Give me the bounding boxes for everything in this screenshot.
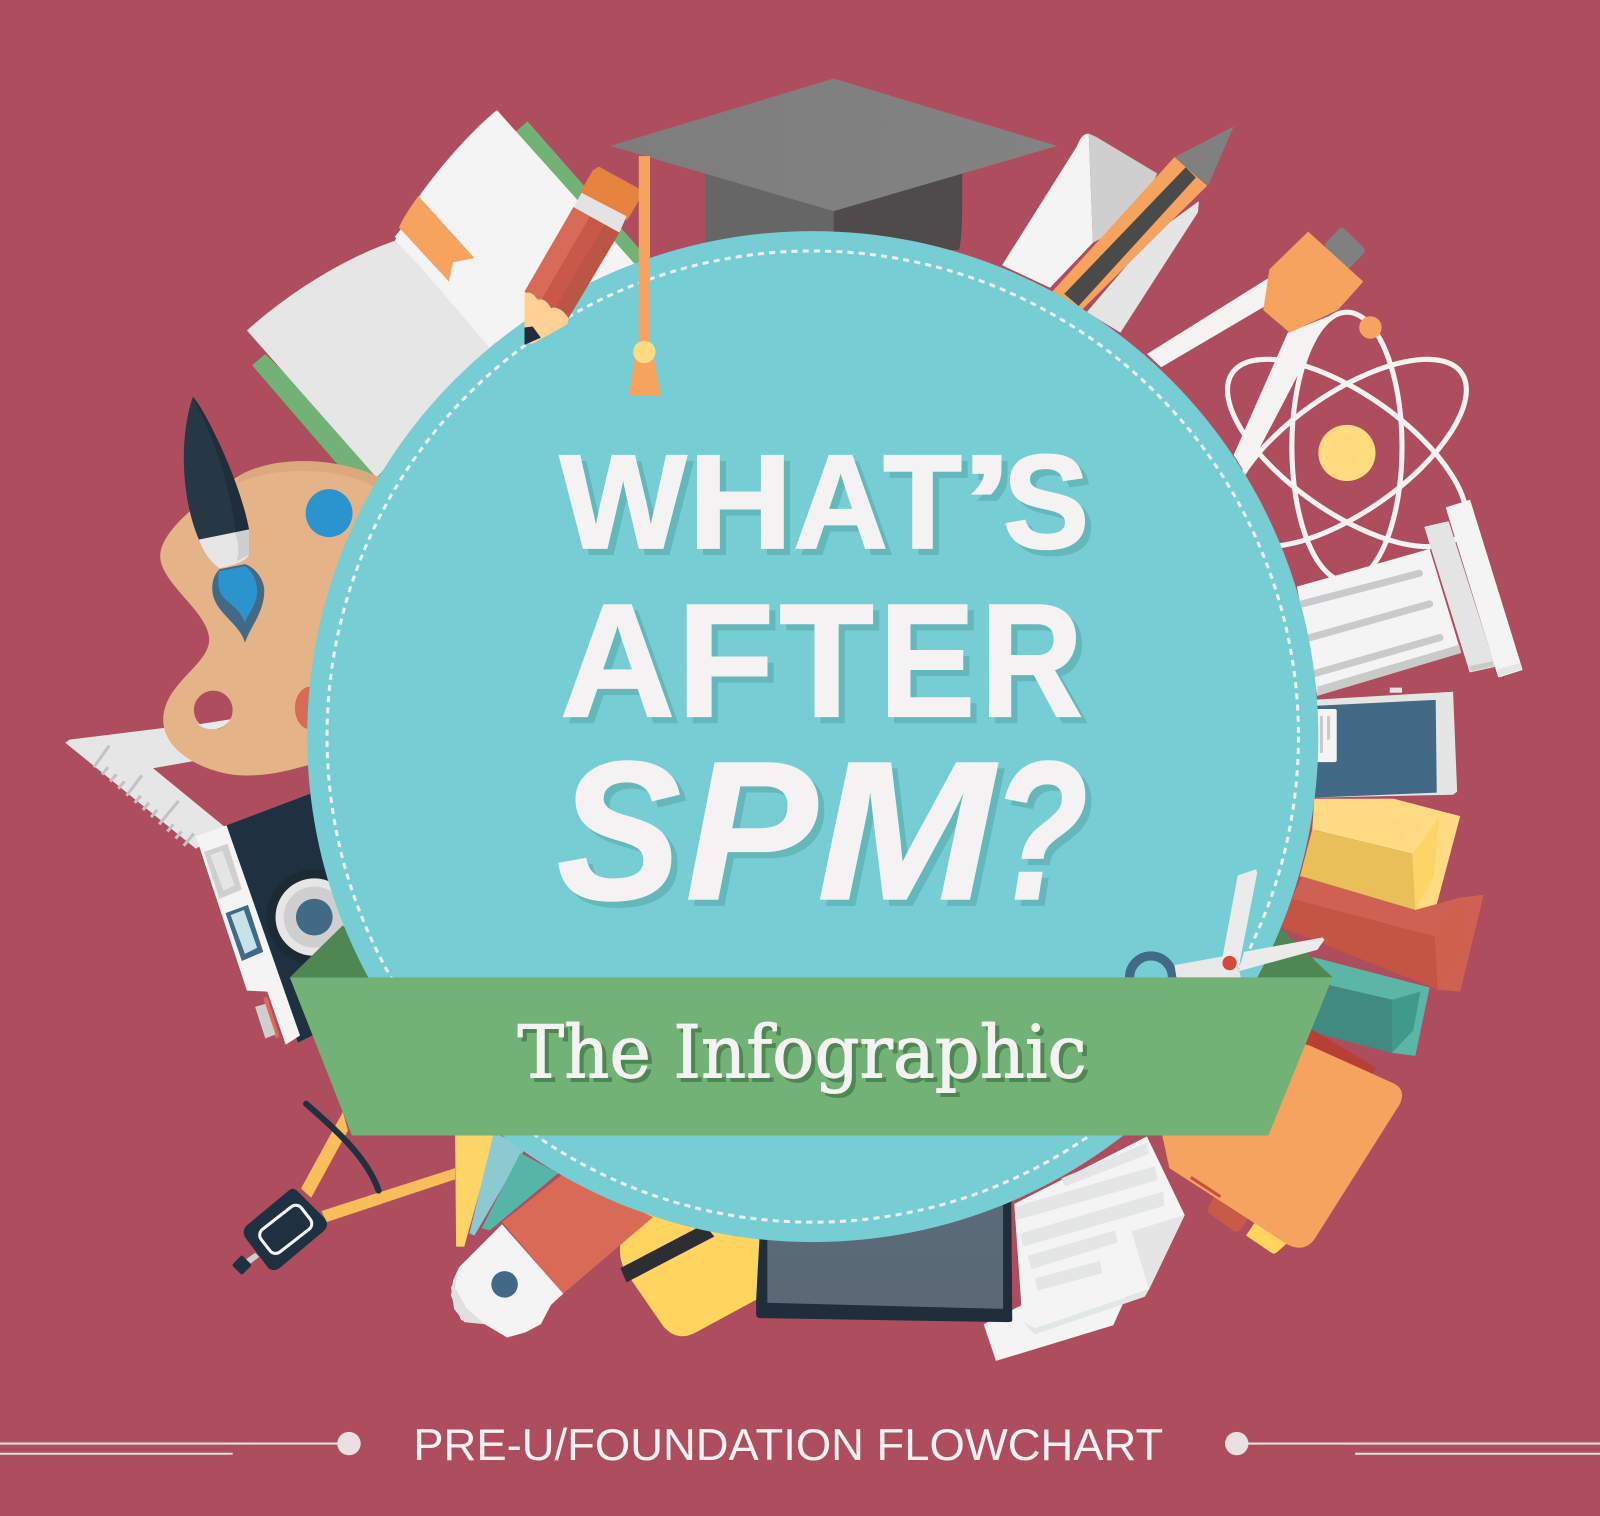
- palette: thumb hole: [194, 691, 233, 729]
- title: AFTER: A: [566, 577, 681, 757]
- icon: graduation cap board: [610, 79, 1057, 211]
- folder: red tab: [1208, 1196, 1249, 1232]
- icon: teal book: [1305, 957, 1430, 1056]
- icon: open book: [247, 110, 645, 513]
- title: AFTER: F: [683, 577, 780, 757]
- title: SPM?: ?: [998, 727, 1094, 947]
- icon: drawing compass: [1147, 226, 1367, 474]
- title: AFTER: F: [677, 571, 774, 751]
- green ribbon banner: [290, 977, 1333, 1135]
- title: AFTER: E: [885, 577, 981, 757]
- icon: red pencil: [524, 168, 640, 345]
- icon: greek column: [1297, 501, 1521, 696]
- icon: paint tube: [451, 1175, 653, 1337]
- paint tube: cap opening: [491, 1271, 518, 1298]
- icon: dark tablet: [756, 1194, 1012, 1322]
- title: WHAT'S: T: [889, 434, 968, 583]
- footer: right rule: [1225, 1432, 1600, 1455]
- title: WHAT'S: W: [566, 434, 693, 583]
- title: SPM?: S: [557, 721, 681, 941]
- title: WHAT'S: ’: [967, 434, 1019, 583]
- folder: yellow tab: [1246, 1219, 1288, 1254]
- footer: left rule: [0, 1432, 361, 1455]
- icon: red book: [1282, 876, 1484, 992]
- title: SPM?: M: [823, 727, 1004, 947]
- ribbon fold right: [1224, 929, 1333, 977]
- icon: orange folder: [1162, 1020, 1402, 1254]
- title: WHAT'S: [560, 428, 1095, 583]
- subtitle: The Infographic: The Infographic: [521, 1014, 1091, 1099]
- title: WHAT'S: S: [1009, 434, 1095, 583]
- icon: grey tipped pencil: [1052, 127, 1234, 312]
- title: SPM?: M: [817, 721, 998, 941]
- title: SPM?: [557, 721, 1094, 947]
- icon: yellow book: [1300, 799, 1460, 912]
- icon: triangle ruler: [65, 727, 227, 849]
- title: AFTER: E: [879, 571, 975, 751]
- title: SPM?: ?: [992, 721, 1088, 941]
- icon: paint brush: [184, 397, 264, 643]
- title: WHAT'S: W: [560, 428, 687, 577]
- footer heading: PRE-U/FOUNDATION FLOWCHART: [413, 1419, 1163, 1470]
- title: WHAT'S: A: [800, 434, 894, 583]
- title: AFTER: [560, 571, 1089, 757]
- title: SPM?: P: [692, 727, 824, 947]
- title: AFTER: R: [980, 571, 1083, 751]
- title: WHAT'S: A: [793, 428, 888, 577]
- graduation cap tassel: [629, 156, 661, 396]
- icon: bow compass: [232, 1104, 455, 1275]
- icon: camera: [196, 788, 388, 1045]
- camera: display: [226, 905, 263, 961]
- icon: colour swatch fan: [455, 1132, 558, 1247]
- atom: electron: [1359, 316, 1382, 339]
- title: SPM?: P: [686, 721, 818, 941]
- title: AFTER: T: [779, 571, 874, 751]
- title: AFTER: A: [560, 571, 675, 751]
- icon: atom: [1198, 312, 1495, 582]
- icon: tablet device: [1311, 688, 1457, 798]
- palette: blue paint: [306, 489, 353, 537]
- title: WHAT'S: S: [1003, 428, 1089, 577]
- subtitle: The Infographic: The Infographic: [517, 1010, 1087, 1095]
- icon: paint palette: [160, 461, 429, 775]
- camera: lens: [266, 869, 362, 965]
- icon: graduation cap base: [705, 171, 962, 250]
- icon: scissors: [1125, 869, 1324, 978]
- camera: viewfinder: [204, 844, 242, 899]
- ribbon fold left: [290, 925, 388, 977]
- title: WHAT'S: T: [883, 428, 962, 577]
- icon: paper documents: [984, 1136, 1185, 1361]
- title: WHAT'S: H: [694, 434, 799, 583]
- icon: yellow card: [620, 1209, 760, 1336]
- icon: white set square: [1002, 134, 1199, 333]
- title: WHAT'S: H: [688, 428, 792, 577]
- book: bookmark: [399, 196, 474, 282]
- title: WHAT'S: ’: [961, 428, 1013, 577]
- main teal circle: [307, 231, 1318, 1242]
- title: AFTER: R: [987, 577, 1089, 757]
- title: AFTER: T: [786, 577, 880, 757]
- atom: nucleus: [1318, 425, 1376, 481]
- dashed circle border: [327, 251, 1298, 1222]
- title: SPM?: S: [563, 727, 687, 947]
- palette: red paint: [295, 687, 326, 729]
